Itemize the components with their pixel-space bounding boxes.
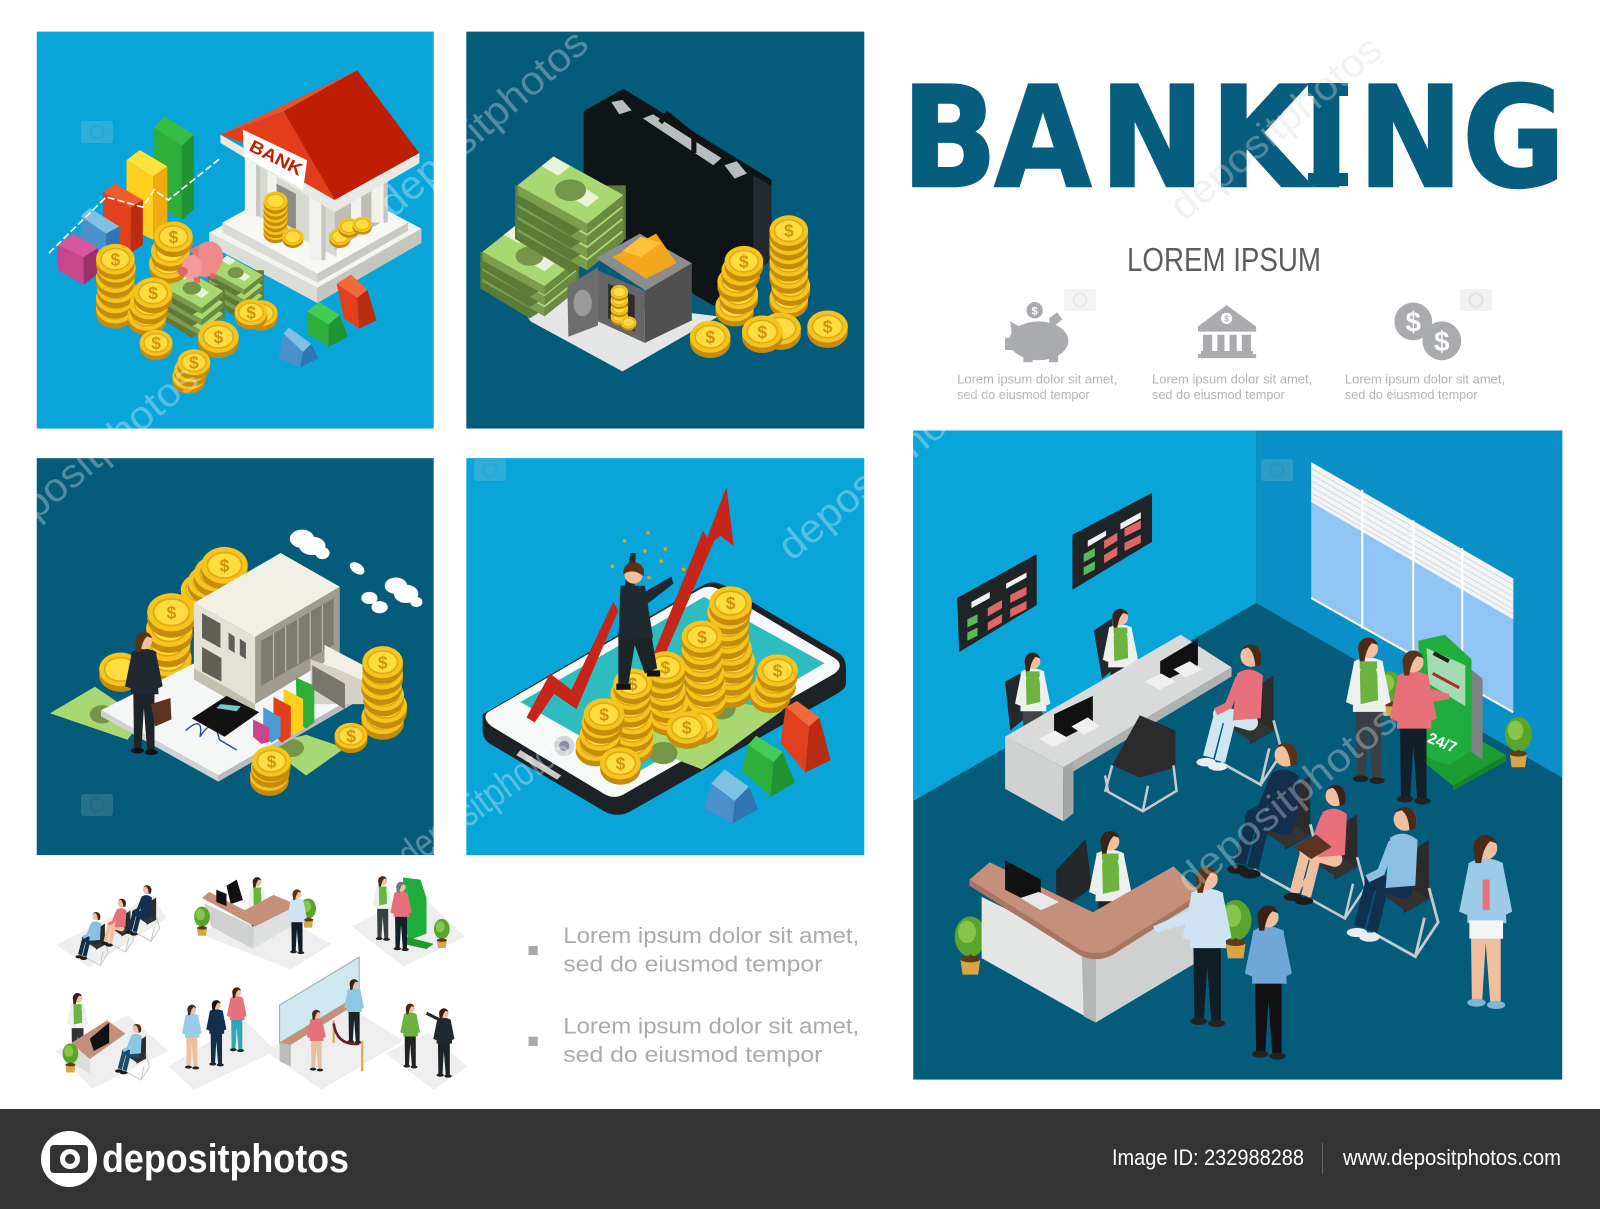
- coins behind the house: [99, 547, 248, 692]
- icon: piggy bank: $: [1032, 305, 1039, 317]
- coin stacks: $: [739, 251, 749, 271]
- coin stacks: $: [697, 627, 707, 647]
- caption 3: sed do eiusmod tempor: [1345, 387, 1478, 402]
- teller behind reception: [1056, 831, 1131, 970]
- calculator: [192, 696, 259, 737]
- icon: dollar coins: $: [1434, 326, 1449, 357]
- watermarks: depositphotos: [1162, 27, 1390, 229]
- coin stacks: $: [189, 352, 199, 372]
- bullet item 1: Lorem ipsum dolor sit amet,: [563, 923, 859, 948]
- bullet item 1: sed do eiusmod tempor: [563, 951, 823, 976]
- blocks: red, green, blue: [704, 701, 831, 823]
- seated customer in pink: [1196, 645, 1282, 785]
- icon: bank building: [1198, 305, 1256, 358]
- coin stacks: $: [267, 751, 277, 771]
- caption 1: sed do eiusmod tempor: [957, 387, 1091, 402]
- money bundles: [480, 156, 626, 318]
- blocks: red, green, blue: [279, 274, 377, 367]
- title: BANKING: BANKING: [902, 58, 1565, 220]
- footer bar: [0, 1109, 1600, 1209]
- coin stacks: $: [757, 322, 767, 342]
- standing woman: [1459, 835, 1512, 1009]
- mini group of people: [182, 987, 247, 1069]
- watermarks: depositphotos: [370, 21, 597, 226]
- logo: [41, 1131, 349, 1187]
- bank building: [209, 70, 421, 303]
- coin stacks: $: [682, 718, 692, 738]
- coin stacks: $: [599, 704, 609, 724]
- coin stacks: $: [148, 283, 158, 303]
- house: [194, 553, 378, 714]
- icon: dollar coins: [1394, 303, 1461, 360]
- atm terminal: [1418, 635, 1506, 791]
- atm terminal: 24/7: [1425, 730, 1459, 757]
- subtitle: LOREM IPSUM: LOREM IPSUM: [1127, 241, 1321, 278]
- bullet item 2: Lorem ipsum dolor sit amet,: [563, 1014, 859, 1039]
- ground tiles: [56, 893, 467, 1090]
- smartphone: [483, 582, 846, 815]
- icon: bank building: $: [1224, 314, 1229, 323]
- coin stacks: $: [169, 227, 179, 247]
- caption 3: [1345, 372, 1505, 402]
- panel: bank interior: [913, 431, 1562, 1080]
- reception counter: [969, 860, 1201, 1022]
- signature: [186, 724, 237, 750]
- mini bar chart: [253, 678, 314, 744]
- coins on the bank steps: [263, 192, 372, 248]
- banknote: [617, 697, 783, 769]
- mini reception: [194, 877, 316, 954]
- caption 2: Lorem ipsum dolor sit amet,: [1152, 372, 1312, 387]
- bar chart: isometric bars: [49, 116, 220, 285]
- coin stacks: [576, 586, 798, 785]
- plant left: [955, 916, 986, 975]
- walls: [913, 431, 1562, 801]
- papers: [491, 266, 718, 371]
- icon: black briefcase: [584, 89, 771, 306]
- businessman climbing: [610, 531, 686, 690]
- walking woman: [1245, 906, 1292, 1060]
- coin stacks: $: [823, 317, 833, 337]
- feature row with icons: [957, 302, 1505, 402]
- coins behind the house: $: [167, 602, 177, 622]
- panel: smartphone with growth arrow: [466, 458, 864, 855]
- window with blinds: [1311, 462, 1513, 712]
- mini atm: [373, 876, 450, 951]
- website: www.depositphotos.com: [1342, 1145, 1561, 1170]
- bullet list: [529, 923, 859, 1067]
- safe with gold bars: [567, 234, 692, 343]
- caption 3: Lorem ipsum dolor sit amet,: [1345, 372, 1505, 387]
- coin stacks: $: [784, 221, 794, 241]
- coin stacks: [96, 221, 278, 394]
- icon: dollar coins: $: [1406, 307, 1421, 338]
- customer at atm: [1390, 650, 1449, 805]
- logo: depositphotos: [102, 1137, 349, 1181]
- coin stacks: $: [214, 327, 224, 347]
- coin stacks: $: [628, 674, 638, 694]
- businessman with briefcase: [125, 632, 171, 755]
- staff woman at atm: [1346, 638, 1391, 784]
- coin stacks: $: [246, 302, 256, 322]
- coin stacks: $: [726, 593, 736, 613]
- plant mid: [1220, 900, 1251, 958]
- caption 1: Lorem ipsum dolor sit amet,: [957, 372, 1117, 387]
- coin stacks: $: [705, 327, 715, 347]
- watermarks: depositphotos: [770, 367, 998, 569]
- mini seated people: [76, 885, 160, 965]
- coins behind the house: $: [220, 555, 230, 575]
- coin stacks: $: [773, 661, 783, 681]
- bank sign text: BANK: [246, 136, 307, 180]
- mini conversation: [400, 1004, 454, 1078]
- rate boards: [957, 493, 1152, 652]
- caption 2: [1152, 372, 1312, 402]
- document: [101, 633, 378, 776]
- coin stacks: $: [660, 657, 670, 677]
- watermarks: depositphotos: [389, 724, 577, 877]
- caption 2: sed do eiusmod tempor: [1152, 387, 1285, 402]
- watermarks: depositphotos: [1168, 698, 1405, 902]
- plant right: [1505, 717, 1532, 767]
- coin stacks: [250, 646, 407, 796]
- panel: house, contract and businessman: [37, 458, 434, 855]
- banknotes: [50, 687, 345, 776]
- isometric mini scenes: [56, 876, 467, 1090]
- clouds: [290, 530, 422, 613]
- bullet item 2: [529, 1014, 859, 1067]
- seated woman with bag: [1284, 785, 1365, 918]
- watermarks: [0, 21, 1492, 902]
- long desk with monitors: [1005, 635, 1232, 821]
- mini service window: [280, 957, 364, 1071]
- bullet item 2: sed do eiusmod tempor: [563, 1042, 823, 1067]
- coin stacks: $: [151, 333, 161, 353]
- image id: Image ID: 232988288: [1112, 1145, 1304, 1170]
- coin stacks: $: [346, 726, 356, 746]
- coin stacks: [690, 215, 848, 358]
- seated man in navy: [1227, 743, 1319, 893]
- mini desk: [63, 993, 149, 1080]
- money bundles: [159, 256, 264, 338]
- panel: bank with charts and coins: [37, 32, 434, 429]
- customer at reception: [1153, 867, 1232, 1027]
- icon: piggy bank: [178, 236, 229, 283]
- icon: piggy bank: [1005, 302, 1068, 362]
- seated man in blue: [1347, 807, 1438, 957]
- coin stacks: $: [616, 753, 626, 773]
- seated tellers with chairs: [1005, 609, 1138, 768]
- coin stacks: $: [378, 652, 388, 672]
- plant behind atm customer: [1378, 671, 1402, 716]
- caption 1: [957, 372, 1117, 402]
- empty chair: [1105, 715, 1177, 811]
- growth arrow: [527, 487, 734, 722]
- coin stacks: $: [110, 249, 120, 269]
- panel: briefcase, money, safe: [466, 32, 864, 429]
- bullet item 1: [529, 923, 859, 976]
